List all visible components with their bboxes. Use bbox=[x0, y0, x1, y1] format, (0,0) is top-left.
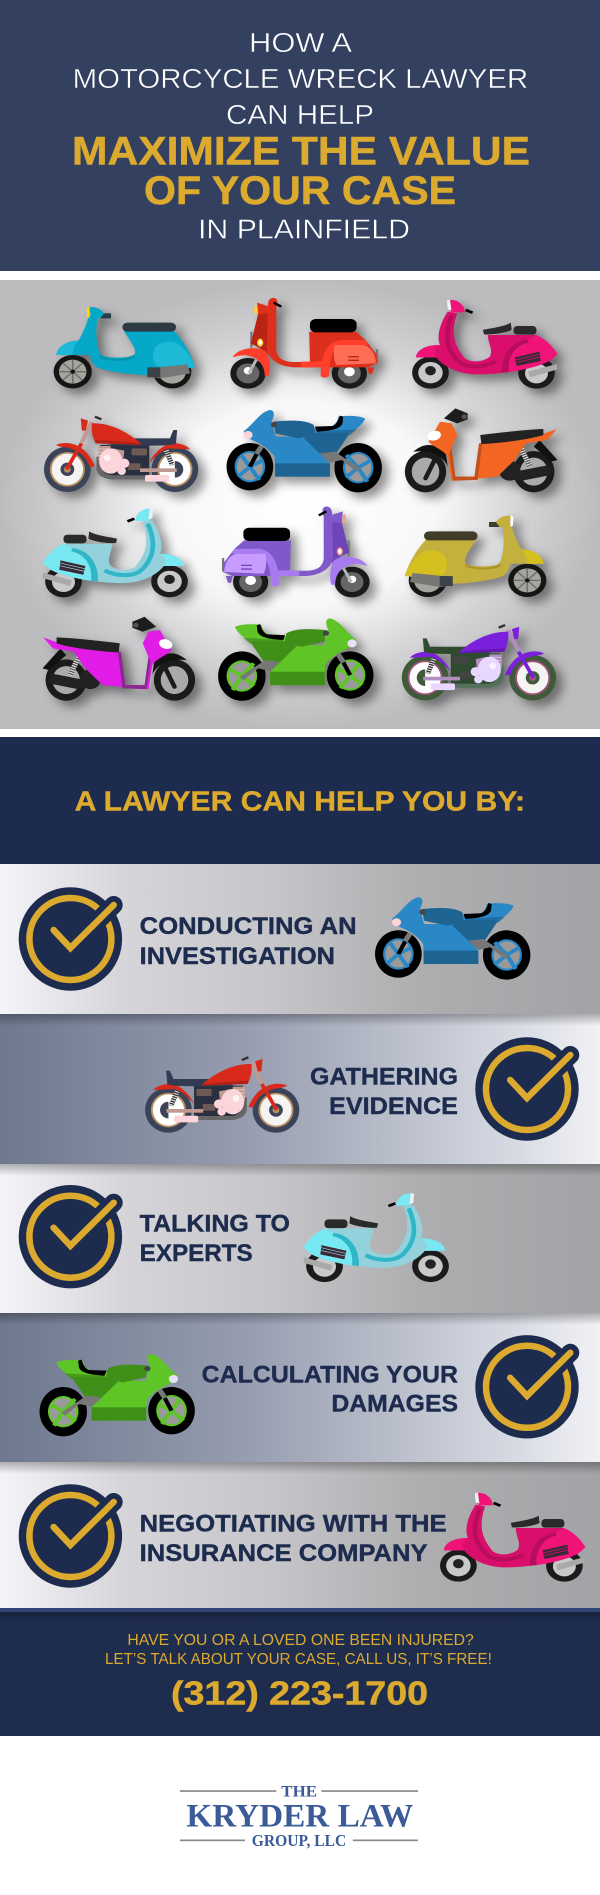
footer call-to-action panel bbox=[0, 1608, 600, 1736]
text: calculating your damages: DAMAGES bbox=[331, 1391, 458, 1418]
motorcycle: purple scooter bbox=[222, 507, 370, 597]
motorcycle: magenta scooter bbox=[42, 617, 195, 701]
panel: talking to experts bbox=[0, 1164, 600, 1313]
title: IN PLAINFIELD bbox=[198, 214, 410, 245]
panel: calculating your damages bbox=[0, 1313, 600, 1462]
header panel bbox=[0, 0, 600, 271]
panel: motorcycle collection bbox=[0, 280, 600, 729]
logo: the kryder law group: GROUP, LLC bbox=[252, 1831, 346, 1850]
title: MOTORCYCLE WRECK LAWYER bbox=[73, 63, 528, 94]
text: calculating your damages: CALCULATING YOUR bbox=[202, 1362, 458, 1389]
title: MAXIMIZE THE VALUE bbox=[72, 130, 530, 174]
icon: check mark bbox=[19, 887, 122, 991]
text: gathering evidence: EVIDENCE bbox=[329, 1093, 458, 1120]
logo: the kryder law group: KRYDER LAW bbox=[186, 1799, 413, 1835]
motorcycle: orange scooter bbox=[405, 408, 558, 492]
text: talking to experts: TALKING TO bbox=[140, 1211, 290, 1238]
text: talking to experts bbox=[140, 1211, 290, 1267]
panel: negotiating with the insurance company bbox=[0, 1462, 600, 1608]
motorcycle: green sport bike bbox=[218, 618, 373, 701]
text: conducting an investigation: INVESTIGATION bbox=[140, 943, 335, 970]
text: negotiating with the insurance company: NEGOTIATING WITH THE bbox=[140, 1511, 447, 1538]
icon: check mark bbox=[19, 1185, 122, 1288]
text: talking to experts: EXPERTS bbox=[140, 1240, 253, 1267]
motorcycle: green sport bike bbox=[40, 1354, 195, 1436]
motorcycle: teal scooter bbox=[54, 307, 195, 388]
title: HOW A bbox=[249, 27, 352, 58]
logo: the kryder law group bbox=[180, 1784, 418, 1850]
motorcycle: aqua scooter bbox=[303, 1193, 449, 1282]
motorcycle: red cruiser bbox=[44, 417, 198, 492]
call-to-action text bbox=[105, 1632, 492, 1668]
text: conducting an investigation: CONDUCTING AN bbox=[140, 913, 357, 940]
motorcycle: blue sport bike bbox=[227, 410, 382, 492]
title: OF YOUR CASE bbox=[144, 169, 456, 213]
heading panel: a lawyer can help you by bbox=[0, 737, 600, 864]
icon: check mark bbox=[19, 1484, 122, 1588]
motorcycle: red scooter bbox=[230, 298, 378, 389]
text: gathering evidence bbox=[310, 1064, 458, 1120]
motorcycle: aqua scooter bbox=[42, 508, 188, 597]
text: negotiating with the insurance company: INSURANCE COMPANY bbox=[140, 1540, 427, 1567]
title: CAN HELP bbox=[226, 99, 374, 130]
motorcycle: pink scooter bbox=[440, 1492, 585, 1582]
motorcycle: yellow scooter bbox=[405, 515, 546, 597]
icon: check mark bbox=[475, 1037, 579, 1141]
text: negotiating with the insurance company bbox=[140, 1511, 447, 1567]
panel: conducting an investigation bbox=[0, 864, 600, 1014]
motorcycle: purple cruiser bbox=[402, 625, 556, 700]
logo: the kryder law group: THE bbox=[281, 1784, 317, 1801]
heading: A LAWYER CAN HELP YOU BY: bbox=[75, 786, 525, 817]
motorcycle: pink scooter bbox=[412, 299, 558, 389]
motorcycle: blue sport bike bbox=[375, 897, 530, 980]
panel: gathering evidence bbox=[0, 1014, 600, 1164]
motorcycle: red cruiser bbox=[145, 1057, 299, 1133]
text: conducting an investigation bbox=[140, 913, 357, 970]
phone number: (312) 223-1700 bbox=[171, 1675, 428, 1712]
icon: check mark bbox=[475, 1335, 579, 1438]
text: gathering evidence: GATHERING bbox=[310, 1064, 458, 1091]
title bbox=[72, 27, 530, 245]
text: calculating your damages bbox=[202, 1362, 458, 1418]
call-to-action text: HAVE YOU OR A LOVED ONE BEEN INJURED? bbox=[127, 1632, 474, 1649]
call-to-action text: LET’S TALK ABOUT YOUR CASE, CALL US, IT’S FREE! bbox=[105, 1651, 492, 1668]
